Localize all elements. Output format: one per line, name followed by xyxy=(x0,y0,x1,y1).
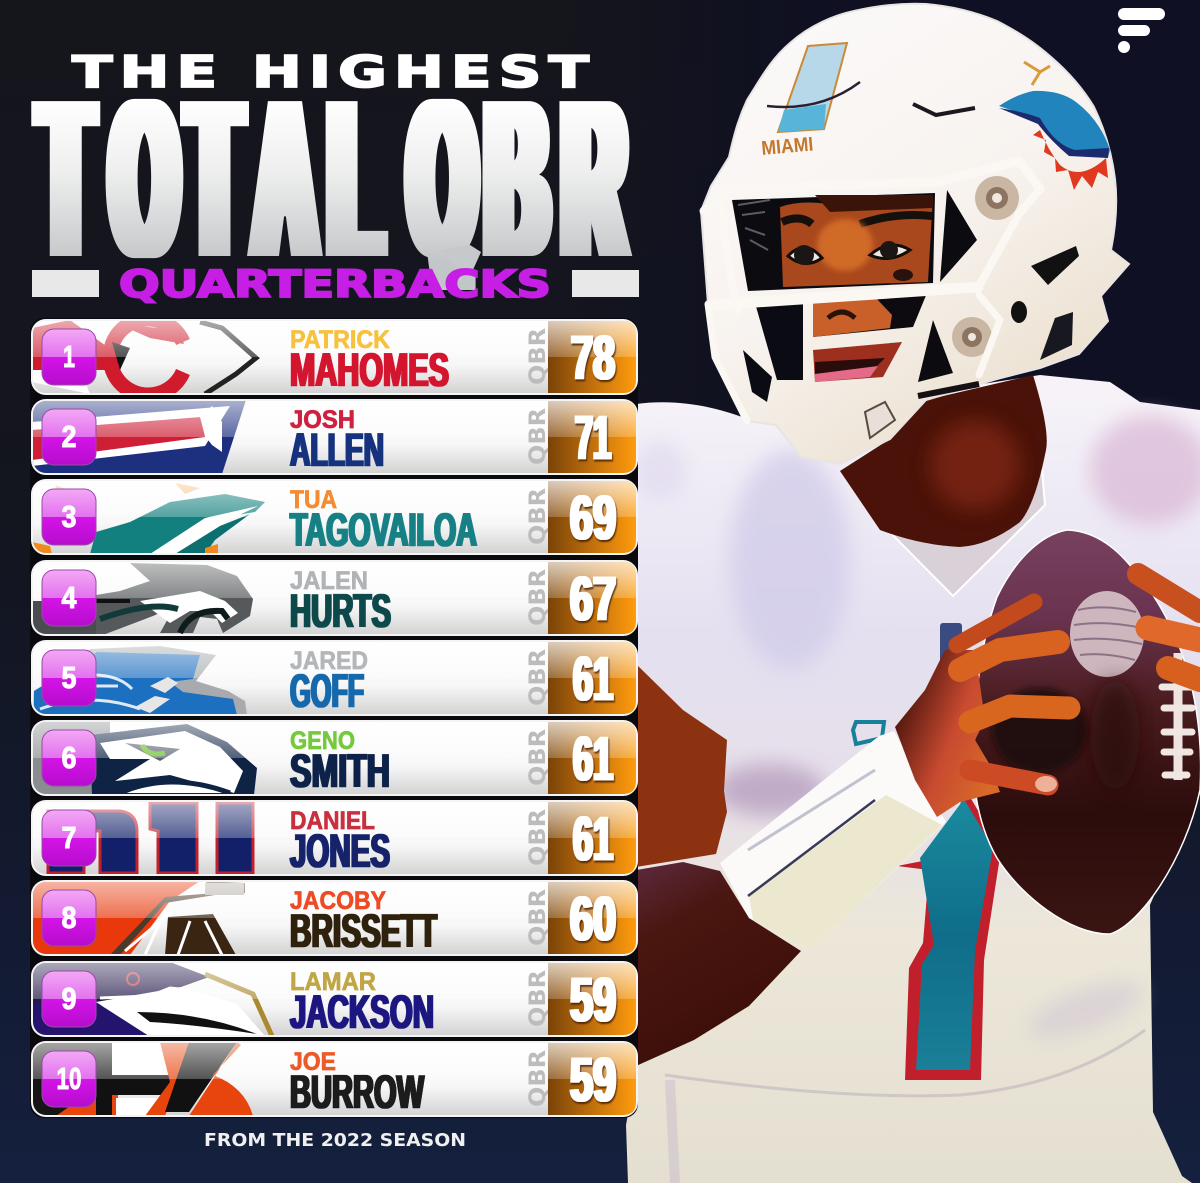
score panel xyxy=(548,321,636,393)
rank badge xyxy=(42,890,96,946)
rank badge xyxy=(42,810,96,866)
brows xyxy=(782,215,932,224)
NFL shield xyxy=(940,623,962,663)
row panel xyxy=(32,400,637,474)
QBR label: QBR xyxy=(526,970,551,1027)
rank badge xyxy=(42,971,96,1027)
player name: JOSH xyxy=(290,406,355,434)
supporting hand xyxy=(1138,574,1200,680)
score panel xyxy=(548,642,636,714)
row 10: Joe Burrow xyxy=(32,1042,637,1118)
score panel: 69 xyxy=(570,484,616,553)
row 5: Jared Goff xyxy=(32,641,637,717)
helmet xyxy=(701,4,1129,464)
forehead shadow xyxy=(815,195,933,212)
helmet stripe xyxy=(778,43,847,132)
QBR label: QBR xyxy=(526,889,551,946)
player name xyxy=(290,1048,424,1118)
brand logo xyxy=(1118,8,1165,53)
background right panel xyxy=(560,0,1200,420)
upper arm xyxy=(636,664,727,867)
stripe lower band xyxy=(778,104,826,132)
face mask xyxy=(704,161,1040,421)
rank badge xyxy=(42,570,96,626)
lower band black xyxy=(918,384,979,396)
row 4: Jalen Hurts xyxy=(32,561,637,637)
player name: TUA xyxy=(290,486,337,514)
player name: DANIEL xyxy=(290,807,375,835)
rank badge: 9 xyxy=(62,981,76,1016)
score panel: 60 xyxy=(570,885,616,954)
title line 3: QUARTERBACKS xyxy=(119,263,551,306)
mouth opening xyxy=(815,358,885,374)
title line 1: THE HIGHEST xyxy=(72,47,589,98)
left eye xyxy=(788,245,822,265)
sunburst xyxy=(1033,130,1108,190)
score panel: 61 xyxy=(573,805,613,874)
right eye xyxy=(870,241,910,259)
logo: Giants xyxy=(48,803,253,873)
visor right window xyxy=(940,190,977,282)
rank badge: 2 xyxy=(62,419,76,454)
title line 2: TOTAL QBR xyxy=(40,52,624,304)
rank badge xyxy=(42,409,96,465)
row panel xyxy=(32,1042,637,1116)
score panel xyxy=(548,963,636,1035)
row panel xyxy=(32,962,637,1036)
score panel xyxy=(548,562,636,634)
score panel xyxy=(548,802,636,874)
player name: JOE xyxy=(290,1048,336,1076)
footnote: FROM THE 2022 SEASON xyxy=(204,1130,466,1151)
mouth xyxy=(813,342,902,382)
score panel: 71 xyxy=(575,404,611,473)
QBR label: QBR xyxy=(526,729,551,786)
row panel xyxy=(32,480,637,554)
logo: Eagles xyxy=(33,563,253,635)
rank badge xyxy=(42,329,96,385)
score panel xyxy=(548,722,636,794)
rank badge: 3 xyxy=(62,499,76,534)
rank badge: 6 xyxy=(62,740,76,775)
row 8: Jacoby Brissett xyxy=(32,881,637,957)
gloss xyxy=(96,563,252,598)
gloss xyxy=(33,401,246,437)
rank badge: 4 xyxy=(62,580,77,615)
lower left window xyxy=(755,300,803,380)
score panel: 78 xyxy=(571,324,615,393)
helmet wordmark: MIAMI xyxy=(761,134,814,160)
eye black xyxy=(893,269,913,281)
logo: Dolphins xyxy=(32,483,265,554)
player illustration xyxy=(626,4,1200,1183)
player name: PATRICK xyxy=(290,326,390,354)
QBR label: QBR xyxy=(526,328,551,385)
title xyxy=(32,47,639,306)
player name: JALEN xyxy=(290,567,368,595)
player name: BRISSETT xyxy=(290,904,437,957)
gloss xyxy=(33,963,258,999)
hair xyxy=(738,200,770,250)
gloss xyxy=(88,646,216,678)
QBR label: QBR xyxy=(526,809,551,866)
player name xyxy=(290,486,477,556)
QBR label: QBR xyxy=(526,569,551,626)
player name: GENO xyxy=(290,727,355,755)
row 7: Daniel Jones xyxy=(32,801,637,877)
rank badge: 8 xyxy=(62,900,76,935)
player name: TAGOVAILOA xyxy=(290,503,477,556)
player name: HURTS xyxy=(290,584,391,637)
lower right window xyxy=(918,320,953,382)
player name: JACOBY xyxy=(290,887,386,915)
player name xyxy=(290,567,391,637)
left rule xyxy=(32,270,99,297)
player name: ALLEN xyxy=(290,423,384,476)
logo: Ravens xyxy=(33,962,272,1036)
rank badge xyxy=(42,1051,96,1107)
face xyxy=(780,195,933,287)
chin guard marks xyxy=(865,402,895,438)
score panel: 59 xyxy=(570,1046,616,1115)
score panel xyxy=(548,481,636,553)
collar xyxy=(868,470,1045,596)
helmet vent xyxy=(767,82,860,107)
rank badge: 5 xyxy=(62,660,76,695)
score panel xyxy=(548,401,636,473)
logo: Bengals xyxy=(33,1042,253,1116)
gloss xyxy=(33,722,246,758)
row 9: Lamar Jackson xyxy=(32,962,637,1038)
forearm xyxy=(631,862,801,1066)
row list backing xyxy=(30,318,638,1118)
lower left slit xyxy=(743,350,772,402)
player name xyxy=(290,727,390,797)
logo: Browns xyxy=(32,881,245,955)
logo: Chiefs xyxy=(32,319,256,395)
rank badge xyxy=(42,730,96,786)
jaw vent xyxy=(1040,312,1073,360)
score panel: 59 xyxy=(570,966,616,1035)
neck highlight xyxy=(930,420,1020,510)
player name: LAMAR xyxy=(290,968,376,996)
row panel xyxy=(32,801,637,875)
rank badge: 1 xyxy=(63,339,75,374)
wristband xyxy=(720,731,946,951)
row panel xyxy=(32,721,637,795)
player name xyxy=(290,807,390,877)
helmet shell xyxy=(701,4,1129,464)
player name xyxy=(290,326,449,396)
row 6: Geno Smith xyxy=(32,721,637,797)
QBR label: QBR xyxy=(526,488,551,545)
row 3: Tua Tagovailoa xyxy=(32,480,637,556)
rank badge xyxy=(42,650,96,706)
nose window xyxy=(813,293,927,337)
logo: Lions xyxy=(33,646,247,715)
Q tail xyxy=(440,245,481,272)
QBR label: QBR xyxy=(526,649,551,706)
logo: Seahawks xyxy=(33,721,257,795)
player name xyxy=(290,968,434,1038)
score panel xyxy=(548,1043,636,1115)
visor opening xyxy=(732,193,935,291)
jersey xyxy=(626,375,1200,1183)
player name: GOFF xyxy=(290,664,364,717)
player name: JONES xyxy=(290,824,390,877)
row panel xyxy=(32,881,637,955)
helmet vent right xyxy=(913,104,975,115)
rank badge xyxy=(42,489,96,545)
player name xyxy=(290,647,368,717)
player name xyxy=(290,406,384,476)
row 1: Patrick Mahomes xyxy=(32,319,637,396)
gloss xyxy=(33,321,258,357)
score panel: 67 xyxy=(570,565,616,634)
ear pad top xyxy=(975,176,1019,220)
sun star xyxy=(1024,62,1050,85)
side vent xyxy=(1031,246,1079,285)
football xyxy=(973,530,1200,934)
gloss xyxy=(33,882,245,918)
rank badge: 7 xyxy=(62,820,76,855)
number 1 xyxy=(897,790,1001,1080)
neck xyxy=(840,375,1047,547)
throwing hand xyxy=(895,602,1069,817)
row panel xyxy=(32,641,637,715)
jersey patch xyxy=(853,722,884,744)
lips xyxy=(815,366,878,382)
row panel xyxy=(32,320,637,394)
score panel xyxy=(548,882,636,954)
player name: JARED xyxy=(290,647,368,675)
player name xyxy=(290,887,437,957)
ear pad bottom xyxy=(952,317,992,357)
player name: SMITH xyxy=(290,744,390,797)
dolphin logo xyxy=(999,91,1110,158)
player name: MAHOMES xyxy=(290,343,449,396)
side hole xyxy=(1011,301,1027,323)
gloss xyxy=(55,483,265,517)
score panel: 61 xyxy=(573,725,613,794)
QBR label: QBR xyxy=(526,408,551,465)
cheek highlight xyxy=(817,219,873,271)
rank badge: 10 xyxy=(56,1061,82,1096)
nose xyxy=(813,297,892,337)
gloss xyxy=(46,802,254,838)
QBR label: QBR xyxy=(526,1050,551,1107)
row 2: Josh Allen xyxy=(32,400,637,476)
player name: JACKSON xyxy=(290,985,434,1038)
row panel xyxy=(32,561,637,635)
player name: BURROW xyxy=(290,1065,424,1118)
nostril xyxy=(828,312,855,318)
right rule xyxy=(572,270,639,297)
gloss xyxy=(33,1043,241,1079)
logo: Bills xyxy=(32,400,246,474)
score panel: 61 xyxy=(573,645,613,714)
